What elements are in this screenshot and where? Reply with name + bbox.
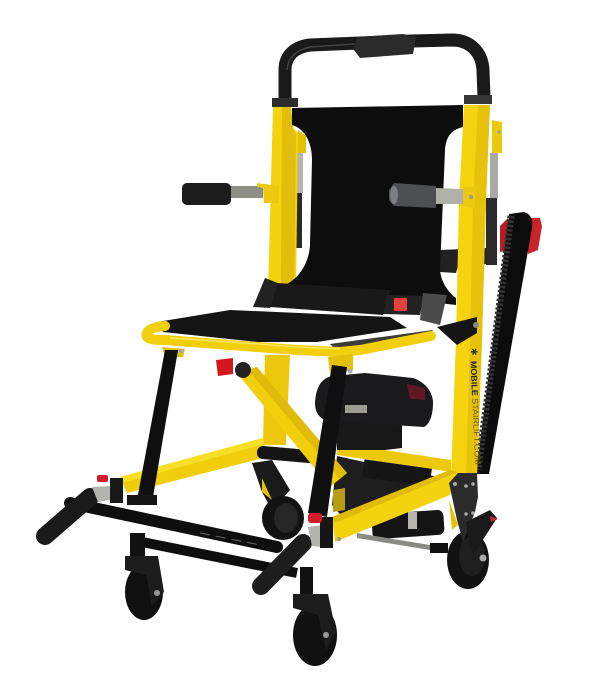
undercarriage mechanism xyxy=(252,445,445,520)
x-brace xyxy=(216,358,347,487)
front right bar xyxy=(332,470,458,542)
backrest pad xyxy=(285,105,463,305)
left yellow post xyxy=(268,107,298,300)
right yellow post xyxy=(451,105,490,477)
right folding grip xyxy=(261,513,333,594)
brand logo and text on post: MOBILE STAIRLIFT.COM xyxy=(469,361,483,465)
left folding grip xyxy=(45,475,157,536)
rear yellow frame rails xyxy=(296,120,502,248)
right side grip xyxy=(389,183,475,208)
front left caster xyxy=(125,533,164,620)
top push handle xyxy=(272,34,492,107)
brand logo and text on post: ✱ xyxy=(469,348,479,356)
motor and axle xyxy=(357,510,448,553)
back cross bar xyxy=(337,443,451,472)
front right caster xyxy=(293,594,337,666)
track assembly xyxy=(440,198,542,474)
left side grip xyxy=(182,183,279,205)
rear left wheel xyxy=(262,496,304,540)
rear right wheel and plate xyxy=(447,473,498,589)
centre yellow post xyxy=(263,355,290,445)
left cross bar xyxy=(120,438,267,493)
seat frame rim xyxy=(147,326,433,354)
battery unit xyxy=(315,373,433,450)
lap belt and buckle xyxy=(253,278,479,345)
seat pad xyxy=(157,310,407,342)
foot rail tubes xyxy=(70,503,297,573)
front legs xyxy=(137,347,353,517)
